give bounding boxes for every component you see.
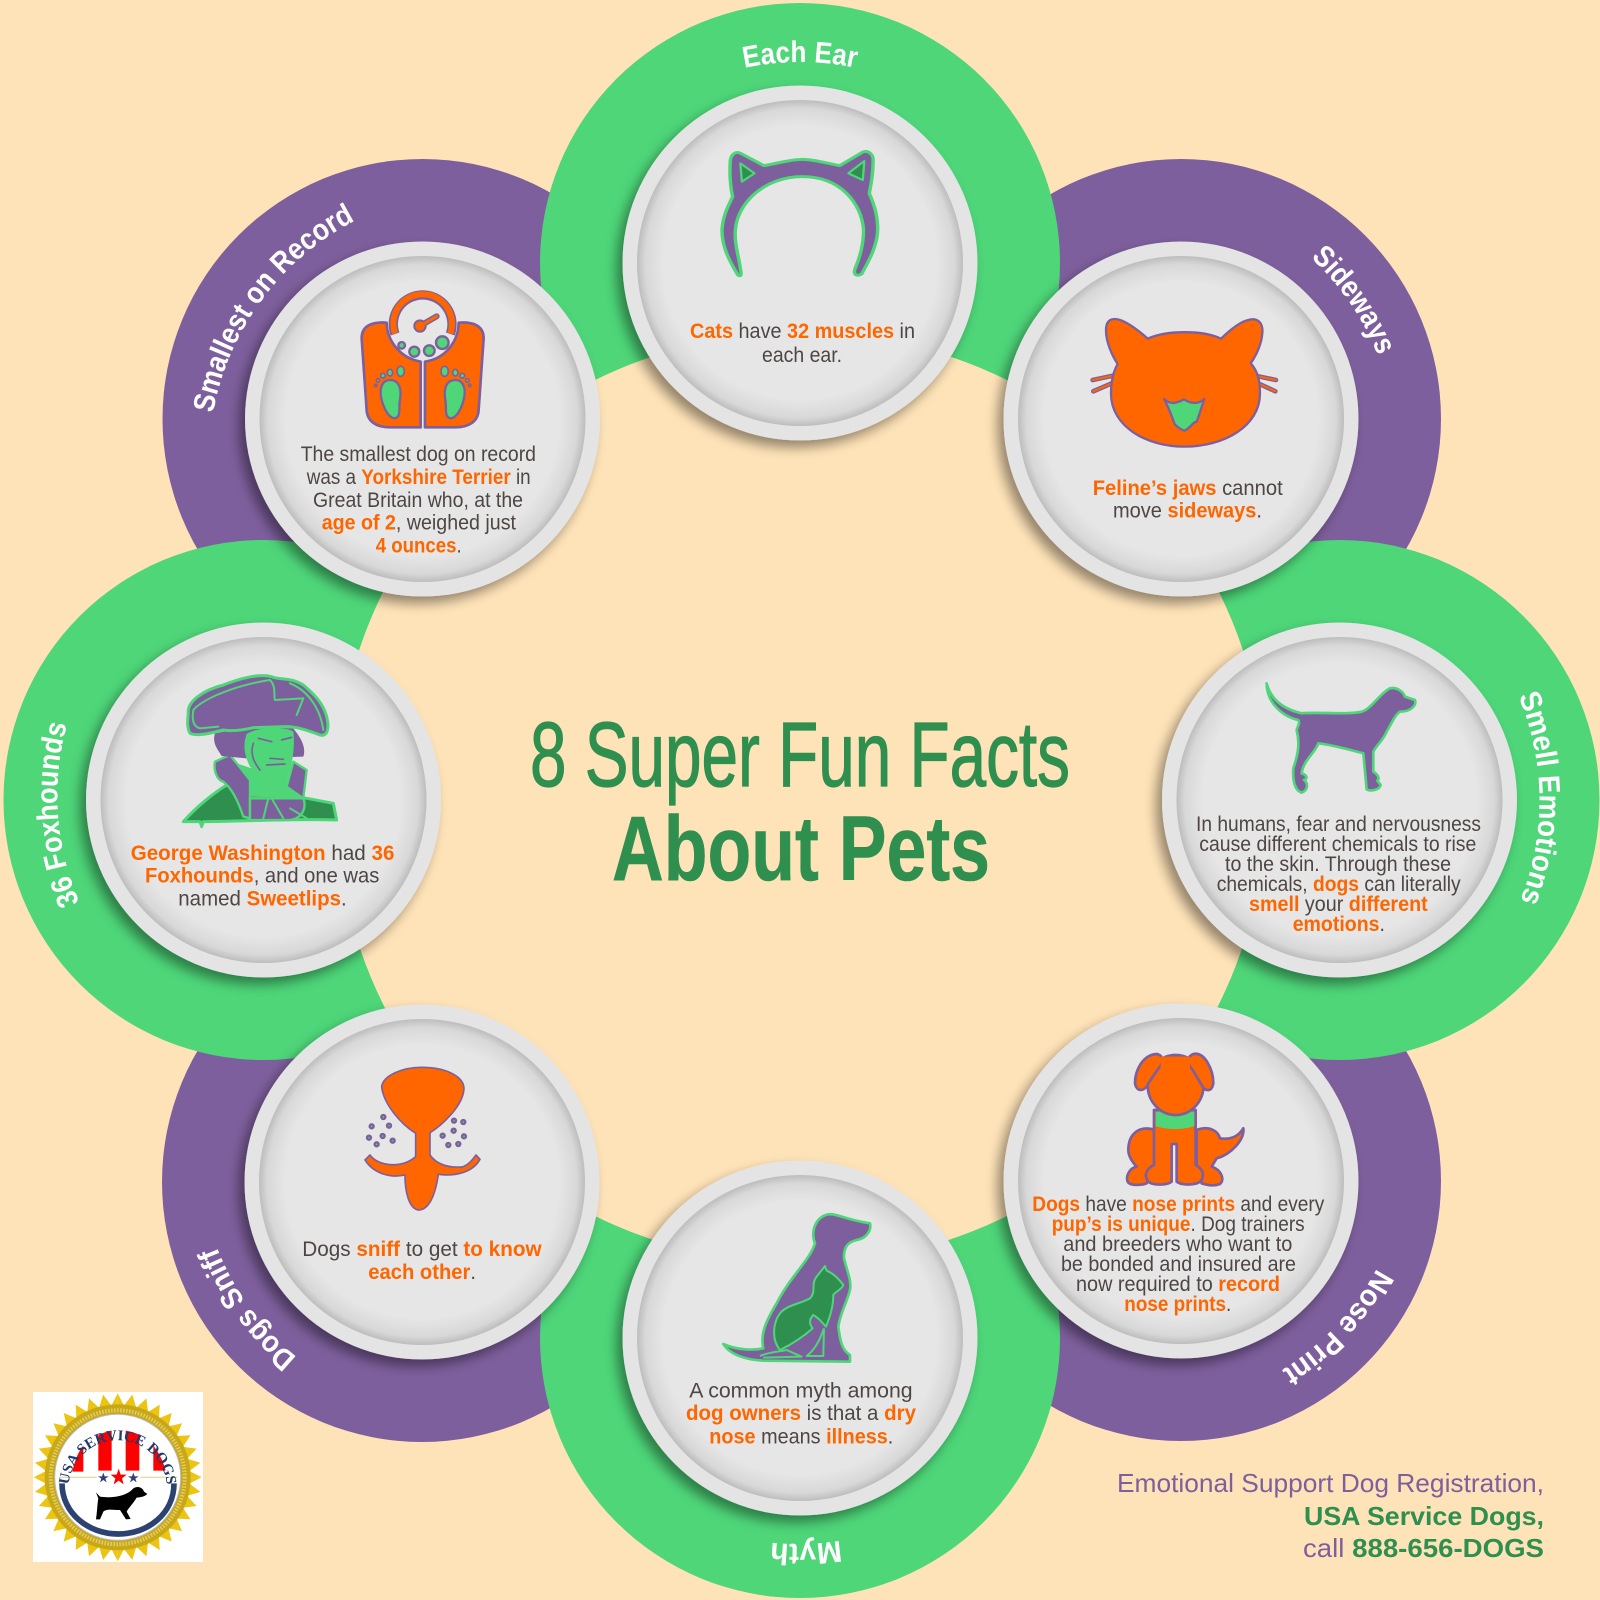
icon: sitting puppy xyxy=(1127,1054,1243,1185)
fact text: dogs sniff: each other. xyxy=(368,1261,476,1284)
fact text: smallest on record xyxy=(301,443,536,558)
fact text: smell emotions: chemicals, dogs can literally xyxy=(1217,873,1461,896)
label: smell emotions: Smell Emotions xyxy=(1520,692,1560,904)
fact text: myth: A common myth among xyxy=(689,1380,913,1402)
fact text: nose print: nose prints. xyxy=(1124,1293,1231,1316)
fact text: smallest on record: The smallest dog on record xyxy=(301,443,536,466)
title: About Pets xyxy=(612,798,990,900)
fact text: sideways: move sideways. xyxy=(1113,500,1262,522)
fact text: each ear: Cats have 32 muscles in xyxy=(690,320,915,343)
fact text: smallest on record: was a Yorkshire Terrier in xyxy=(306,466,531,489)
fact text: nose print: Dogs have nose prints and every xyxy=(1032,1193,1325,1216)
central cream circle xyxy=(335,332,1267,1264)
fact text: 36 foxhounds: Foxhounds, and one was xyxy=(145,864,379,888)
fact text: nose print xyxy=(1032,1193,1325,1316)
footer: registration call to action: call 888-656-DOGS xyxy=(1303,1533,1544,1563)
title: 8 Super Fun Facts xyxy=(530,704,1070,806)
fact text: smell emotions: emotions. xyxy=(1293,913,1385,936)
fact text: 36 foxhounds: named Sweetlips. xyxy=(178,888,347,910)
panel: dogs sniff xyxy=(196,1004,602,1373)
logo: USA Service Dogs seal: USA SERVICE DOGS xyxy=(58,1430,176,1484)
fact text: sideways: Feline’s jaws cannot xyxy=(1093,477,1283,500)
icon: dog and cat silhouette xyxy=(723,1214,870,1362)
fact text: 36 foxhounds xyxy=(131,842,394,910)
panel: 36 foxhounds xyxy=(36,622,443,992)
icon: dog nose sniffing xyxy=(365,1067,480,1210)
panel: nose print xyxy=(990,1002,1394,1385)
fact text: smallest on record: age of 2, weighed just xyxy=(322,512,516,534)
footer: registration call to action: USA Service Dogs, xyxy=(1304,1501,1544,1531)
fact text: myth xyxy=(686,1380,916,1448)
icon: dog silhouette xyxy=(1267,683,1415,793)
fact text: smallest on record: 4 ounces. xyxy=(376,534,462,558)
label: nose print: Nose Print xyxy=(1282,1270,1394,1385)
label: smallest on record: Smallest on Record xyxy=(194,202,354,412)
fact text: myth: nose means illness. xyxy=(709,1426,893,1448)
fact text: myth: dog owners is that a dry xyxy=(686,1402,916,1425)
icon: bathroom scale xyxy=(362,294,484,427)
footer: registration call to action xyxy=(1117,1468,1544,1563)
label: sideways: Sideways xyxy=(1314,246,1391,354)
label: 36 foxhounds: 36 Foxhounds xyxy=(36,722,78,908)
icon: George Washington portrait xyxy=(183,676,337,827)
purple lobes xyxy=(162,159,1441,1442)
logo: USA Service Dogs seal xyxy=(33,1392,203,1562)
icon: cat face xyxy=(1093,319,1276,447)
fact text: smell emotions: In humans, fear and nervousness xyxy=(1196,813,1481,836)
fact text: smallest on record: Great Britain who, at the xyxy=(313,489,523,512)
panel: each ear xyxy=(609,40,979,456)
footer: registration call to action: Emotional Support Dog Registration, xyxy=(1117,1468,1544,1498)
panel: myth xyxy=(609,1160,979,1566)
fact text: dogs sniff: Dogs sniff to get to know xyxy=(302,1238,542,1261)
panel: smallest on record xyxy=(194,202,602,612)
panel: smell emotions xyxy=(1148,622,1560,992)
fact text: nose print: be bonded and insured are xyxy=(1061,1253,1296,1276)
fact text: each ear: each ear. xyxy=(762,344,842,367)
title xyxy=(530,704,1070,900)
fact text: nose print: now required to record xyxy=(1076,1273,1280,1296)
label: each ear: Each Ear xyxy=(742,40,858,68)
fact text: smell emotions: cause different chemicals to rise xyxy=(1199,833,1476,856)
fact text: smell emotions: smell your different xyxy=(1249,893,1428,916)
fact text: smell emotions: to the skin. Through these xyxy=(1225,853,1451,876)
panel: sideways xyxy=(990,242,1391,612)
icon: cat ears headband xyxy=(722,152,878,276)
label: dogs sniff: Dogs Sniff xyxy=(196,1249,296,1372)
fact text: nose print: and breeders who want to xyxy=(1063,1233,1292,1256)
fact text: nose print: pup’s is unique. Dog trainers xyxy=(1052,1213,1305,1236)
fact text: each ear xyxy=(690,320,915,367)
fact text: sideways xyxy=(1093,477,1283,522)
label: myth: Myth xyxy=(772,1537,841,1566)
fact text: 36 foxhounds: George Washington had 36 xyxy=(131,842,394,865)
fact text: smell emotions xyxy=(1196,813,1481,936)
fact text: dogs sniff xyxy=(302,1238,542,1284)
